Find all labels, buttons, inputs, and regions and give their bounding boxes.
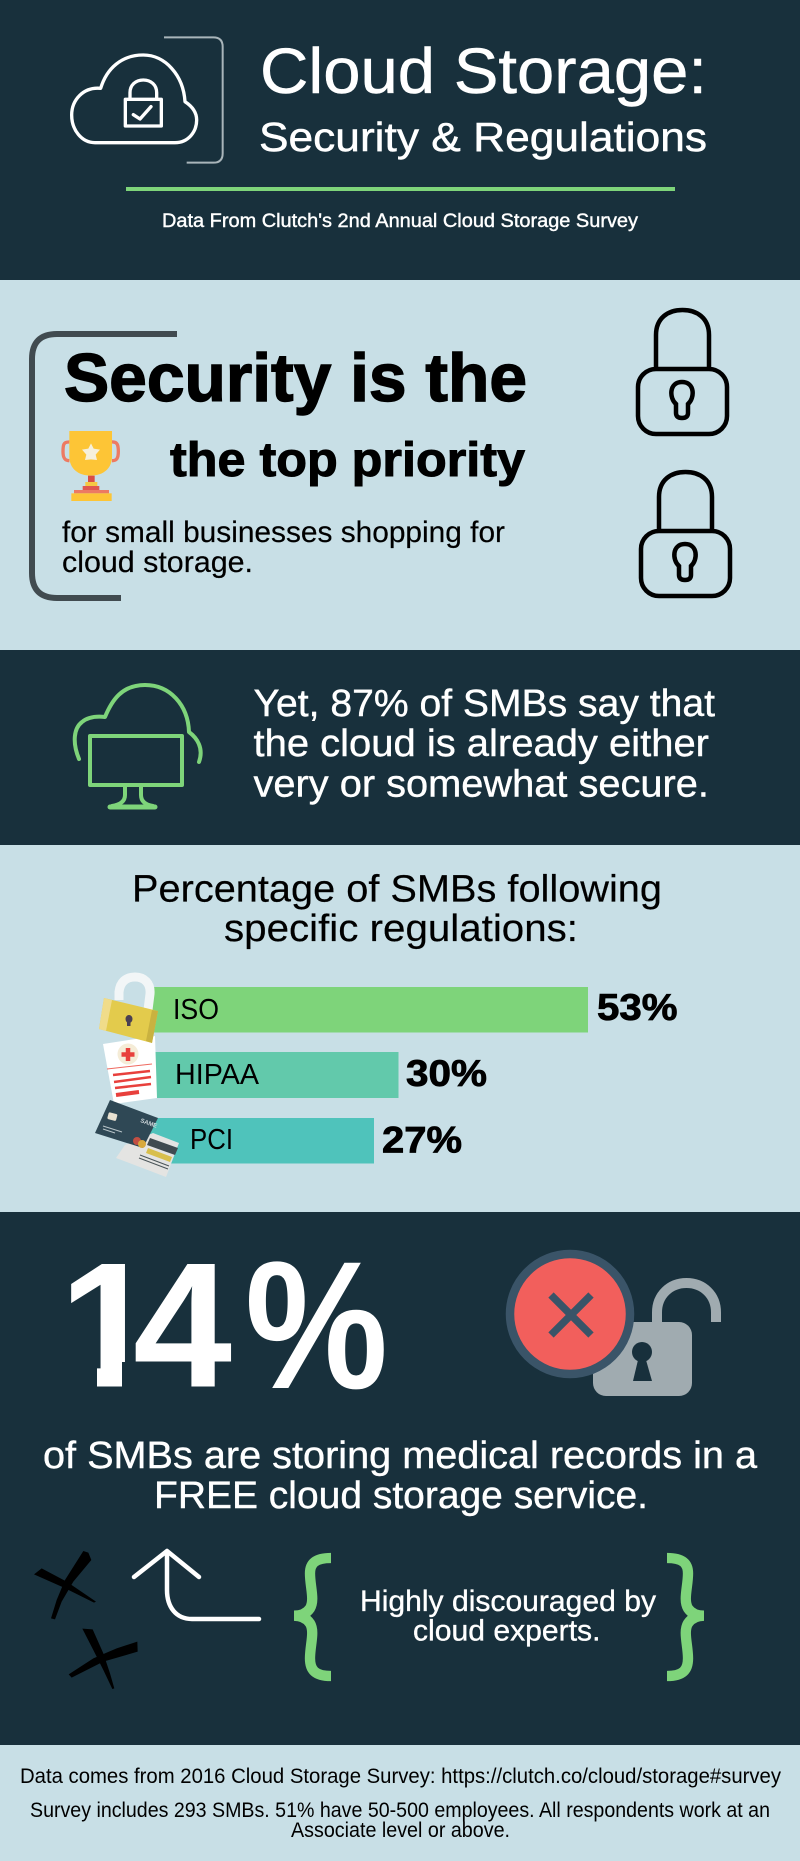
icon: black x marks <box>34 1551 138 1689</box>
panel: footer sources <box>0 1745 800 1861</box>
panel: header <box>0 0 800 280</box>
bar: HIPAA: 30% <box>406 1053 487 1094</box>
stat: 14 percent <box>50 1223 388 1427</box>
icon: bank cards: SAME <box>139 1118 158 1130</box>
text: highly discouraged: Highly discouraged by <box>360 1585 656 1618</box>
bar: ISO: 53% <box>597 987 678 1028</box>
heading: security is the: Security is the <box>64 340 527 416</box>
icon: cloud monitor <box>75 685 201 807</box>
text: 87 percent: Yet, 87% of SMBs say that <box>254 683 715 725</box>
text: 87 percent: the cloud is already either <box>254 723 709 765</box>
icon: cloud with padlock <box>72 37 223 163</box>
bar: HIPAA <box>150 1052 487 1098</box>
bar: ISO: ISO <box>173 994 219 1026</box>
panel: 14 percent medical records <box>0 1212 800 1745</box>
icon: unlocked padlock with x <box>510 1254 716 1396</box>
text: for small businesses: for small businesses shopping for <box>62 516 505 549</box>
bar: PCI: 27% <box>382 1120 462 1160</box>
text: highly discouraged: cloud experts. <box>413 1614 600 1648</box>
title: Security & Regulations <box>259 114 707 160</box>
text: survey details: Associate level or above. <box>291 1819 510 1842</box>
divider line <box>126 187 675 191</box>
bar: PCI <box>150 1118 462 1164</box>
bar chart <box>95 977 678 1177</box>
bar: HIPAA: HIPAA <box>175 1059 260 1091</box>
icon: yellow padlock <box>99 977 158 1043</box>
text: medical records: of SMBs are storing medical records in a <box>43 1435 758 1477</box>
heading: percentage of SMBs: Percentage of SMBs following <box>132 868 662 910</box>
bracket <box>32 334 177 598</box>
left brace <box>294 1558 331 1676</box>
heading: the top priority: the top priority <box>170 434 525 487</box>
panel: security is the top priority <box>0 280 800 650</box>
panel: regulations chart <box>0 845 800 1212</box>
icon: padlock top <box>638 310 727 434</box>
arrow <box>134 1551 259 1619</box>
icon: trophy <box>63 431 118 501</box>
text: survey details: Survey includes 293 SMBs. 51% have 50-500 employees. All respondents work at an <box>30 1799 770 1822</box>
heading: percentage of SMBs: specific regulations: <box>224 908 578 950</box>
right brace <box>667 1558 704 1676</box>
title <box>259 35 707 160</box>
text: highly discouraged <box>360 1585 656 1648</box>
icon: bank cards <box>95 1100 179 1177</box>
stat: 14 percent: % <box>245 1223 388 1427</box>
icon: padlock bottom <box>641 472 730 596</box>
text: 87 percent <box>254 683 715 806</box>
text: data source: Data comes from 2016 Cloud Storage Survey: https://clutch.co/cloud/storage#survey <box>20 1765 781 1788</box>
stat: 14 percent: 14 <box>59 1226 232 1424</box>
subtitle: Data From Clutch's 2nd Annual Cloud Storage Survey <box>162 211 639 232</box>
text: medical records <box>43 1435 758 1517</box>
title: Cloud Storage: <box>260 35 707 107</box>
bar: ISO <box>150 987 678 1032</box>
panel: 87 percent secure <box>0 650 800 845</box>
icon: document <box>103 1036 157 1104</box>
text: survey details <box>30 1799 770 1842</box>
text: for small businesses: cloud storage. <box>62 546 253 579</box>
bar: PCI: PCI <box>190 1124 233 1156</box>
text: for small businesses <box>62 516 505 579</box>
heading: percentage of SMBs <box>132 868 662 950</box>
text: 87 percent: very or somewhat secure. <box>254 764 709 806</box>
text: medical records: FREE cloud storage service. <box>154 1475 648 1517</box>
